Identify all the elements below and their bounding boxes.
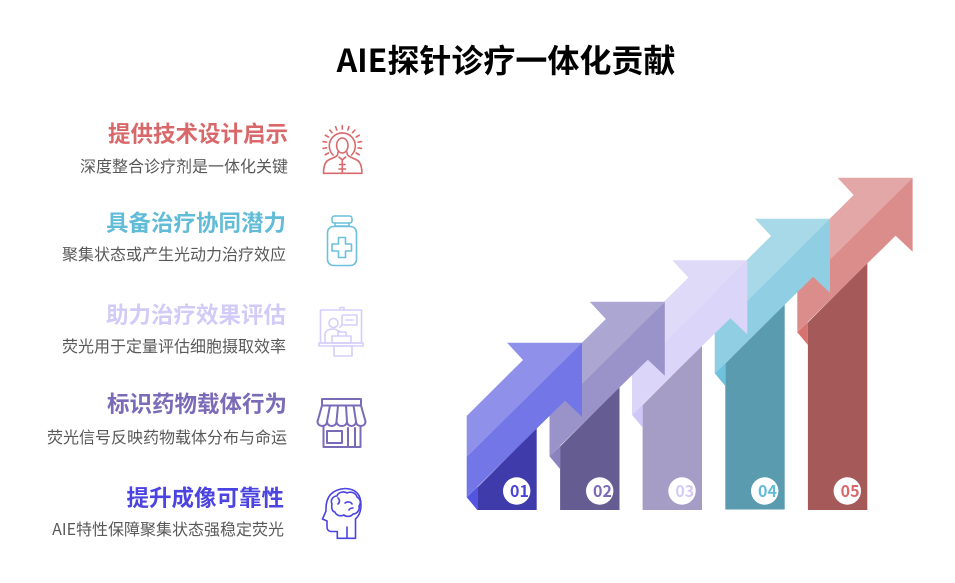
icon: head with brain [322,488,361,538]
badge 03: 03 [675,478,694,502]
badge 04: 04 [758,478,777,502]
icon: medicine bottle [328,216,356,266]
description 5: AIE特性保障聚集状态强稳定荧光 [52,516,284,540]
row 5 text [52,481,284,540]
icon: person with halo [323,126,362,173]
badge 03 [668,477,696,505]
heading 1: 提供技术设计启示 [108,117,288,149]
heading 3: 助力治疗效果评估 [106,298,286,330]
row 1 text [80,117,288,177]
arrow 02 [550,302,665,510]
arrow chart [467,178,913,510]
icon: storefront [318,399,366,447]
heading 5: 提升成像可靠性 [126,481,284,513]
heading 4: 标识药物载体行为 [107,387,287,419]
description 4: 荧光信号反映药物载体分布与命运 [47,424,287,448]
row 2 text [62,206,286,265]
arrow 04 [715,219,830,510]
badge 04 [751,477,778,505]
row 3 text [62,298,286,357]
heading 2: 具备治疗协同潜力 [106,206,286,238]
title: AIE探针诊疗一体化贡献 [337,36,675,82]
arrow 03 [632,260,747,510]
description 1: 深度整合诊疗剂是一体化关键 [80,153,288,177]
badge 01: 01 [510,478,529,502]
badge 02 [586,477,613,505]
badge 05: 05 [841,478,860,502]
row 4 text [47,387,287,448]
icon: presenter at podium [319,308,363,356]
badge 02: 02 [593,478,612,502]
badge 05 [834,477,861,505]
arrow 05 [797,178,913,510]
description 3: 荧光用于定量评估细胞摄取效率 [62,333,286,357]
badge 01 [503,477,530,505]
arrow 01 [467,343,582,510]
description 2: 聚集状态或产生光动力治疗效应 [62,241,286,265]
